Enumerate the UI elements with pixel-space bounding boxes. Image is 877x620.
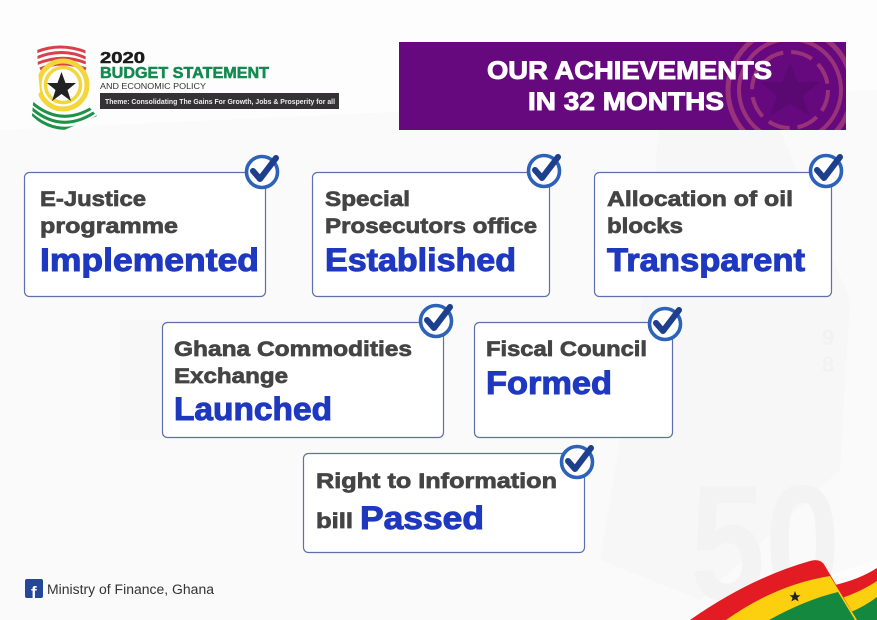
theme bar: Theme: Consolidating The Gains For Growth, Jobs & Prosperity for all xyxy=(105,97,335,106)
card: Special Prosecutors: Special xyxy=(325,187,410,211)
card: Right to Information: bill xyxy=(316,509,353,533)
card: E-Justice: Implemented xyxy=(40,242,259,278)
logo: Ghana map emblem xyxy=(30,47,98,134)
title banner xyxy=(399,42,846,130)
card: Allocation of oil blocks xyxy=(594,156,842,296)
card: Ghana Commodities Exchange: Ghana Commodities xyxy=(174,337,412,361)
banner heading: OUR ACHIEVEMENTS xyxy=(487,57,772,85)
card: Ghana Commodities Exchange xyxy=(162,306,452,438)
banner emblem rings xyxy=(726,42,846,130)
card: Special Prosecutors xyxy=(312,156,560,296)
check icon xyxy=(810,156,842,186)
banner heading xyxy=(487,57,772,116)
faint banknote background: 8 xyxy=(822,352,834,377)
card: Allocation of oil blocks: Transparent xyxy=(607,242,805,278)
card: E-Justice: programme xyxy=(40,214,178,238)
card: Fiscal Council: Formed xyxy=(486,365,612,401)
footer: facebook handle: Ministry of Finance, Ghana xyxy=(47,582,215,597)
card: Right to Information: Passed xyxy=(360,500,484,536)
card: Right to Information: Right to Information xyxy=(316,469,557,493)
theme bar xyxy=(100,93,339,109)
faint banknote background: 9 xyxy=(822,325,834,350)
card: Fiscal Council xyxy=(474,308,680,438)
logo text: 2020 xyxy=(100,50,145,67)
logo text: BUDGET STATEMENT xyxy=(100,65,270,82)
card: Allocation of oil blocks: Allocation of oil xyxy=(607,187,793,211)
card: Ghana Commodities Exchange: Exchange xyxy=(174,364,288,388)
flag star xyxy=(790,591,800,602)
card: Special Prosecutors: Established xyxy=(325,242,516,278)
card: Fiscal Council: Fiscal Council xyxy=(486,337,647,361)
card: Special Prosecutors: Prosecutors office xyxy=(325,214,537,238)
check icon xyxy=(650,308,680,340)
icon: facebook: f xyxy=(31,583,37,602)
check icon xyxy=(562,446,592,478)
footer: facebook handle xyxy=(25,579,215,602)
check icon xyxy=(528,156,560,186)
logo text: AND ECONOMIC POLICY xyxy=(100,82,207,91)
check icon xyxy=(246,156,278,188)
Ghana flag ribbon xyxy=(690,560,877,620)
check icon xyxy=(420,306,452,336)
card: E-Justice: E-Justice xyxy=(40,187,146,211)
card: Right to Information xyxy=(304,446,592,552)
icon: facebook xyxy=(25,579,43,602)
card: E-Justice xyxy=(24,156,278,296)
logo text xyxy=(100,50,339,109)
banner heading: IN 32 MONTHS xyxy=(528,88,724,116)
card: Allocation of oil blocks: blocks xyxy=(607,214,683,238)
card: Ghana Commodities Exchange: Launched xyxy=(174,391,332,427)
